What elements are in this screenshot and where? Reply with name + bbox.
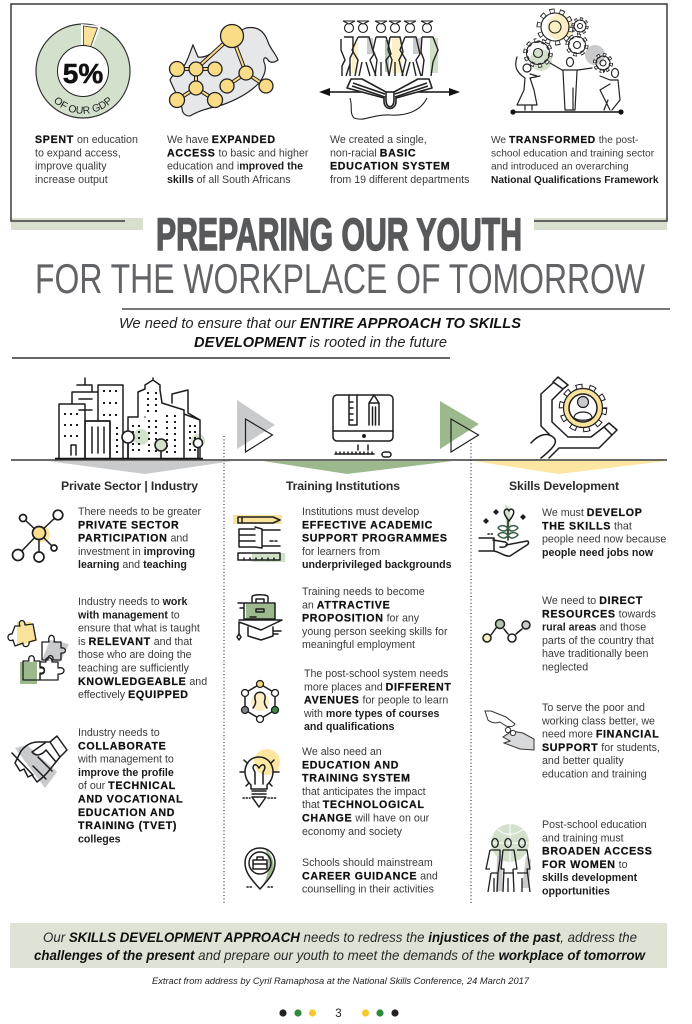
- text: financial support: FINANCIAL: [596, 729, 659, 741]
- icon: linked nodes: [483, 620, 530, 642]
- text: spent: improve quality: [35, 161, 107, 173]
- top frame: [11, 4, 667, 221]
- text: broaden access: Post-school education: [542, 819, 647, 831]
- text: develop the skills: that: [614, 520, 632, 532]
- text: collaborate: improve the profile: [78, 767, 174, 779]
- icon: handshake: [12, 736, 67, 788]
- text: collaborate: TECHNICAL: [108, 780, 176, 792]
- icon: 5% donut: OF OUR GDP: [54, 97, 110, 114]
- text: private sector participation: investment in: [78, 546, 144, 558]
- title: [35, 209, 645, 302]
- text: private sector participation: learning: [78, 559, 119, 571]
- icon: plant in hand: [479, 504, 528, 556]
- wedge: grey: [48, 461, 233, 474]
- text: academic support: Institutions must develop: [302, 506, 419, 518]
- text: education and training system: TECHNOLOGICAL: [323, 799, 425, 811]
- text: education and training system: will have on our: [355, 812, 429, 824]
- text: broaden access: FOR WOMEN: [542, 859, 616, 871]
- text: private sector participation: There needs to be greater: [78, 506, 201, 518]
- text: collaborate: COLLABORATE: [78, 740, 166, 752]
- text: spent: to expand access,: [35, 147, 121, 159]
- text: different avenues: The post-school system needs: [304, 668, 448, 680]
- text: develop the skills: people need now because: [542, 534, 666, 546]
- text: broaden access: to: [619, 859, 628, 871]
- text: attractive proposition: ATTRACTIVE: [317, 599, 390, 611]
- text: different avenues: DIFFERENT: [386, 681, 452, 693]
- text: education and training system: EDUCATION AND: [302, 759, 399, 771]
- text: work with management: EQUIPPED: [128, 689, 189, 701]
- icon: 5% donut: [35, 23, 131, 119]
- icon: city skyline: [55, 378, 205, 459]
- text: develop the skills: We must DEVELOP: [542, 507, 642, 519]
- text: work with management: is: [78, 636, 89, 648]
- icon: map pin with briefcase: [245, 848, 275, 889]
- text: expanded access: to basic and higher: [218, 147, 308, 159]
- icon: briefcase and graduation cap: [237, 595, 282, 640]
- icon: puzzle pieces: [8, 621, 69, 684]
- text: broaden access: skills development: [542, 872, 638, 884]
- icon: light bulb pencil: [240, 749, 280, 807]
- text: career guidance: counselling in their activities: [302, 884, 434, 896]
- text: expanded access: skills: [167, 174, 194, 186]
- wedge: yellow: [473, 461, 666, 474]
- arrow: green: [440, 401, 479, 452]
- text: private sector participation: PARTICIPATION: [78, 533, 168, 545]
- text: spent: increase output: [35, 174, 108, 186]
- callout banner: Our SKILLS DEVELOPMENT APPROACH needs to redress the injustices of the past, address the: [43, 930, 637, 945]
- icon: 5% donut: 5%: [63, 58, 103, 89]
- text: collaborate: AND VOCATIONAL: [78, 794, 183, 806]
- callout banner: challenges of the present and prepare our youth to meet the demands of the workplace of tomorrow: [34, 948, 646, 963]
- text: attractive proposition: meaningful employment: [302, 639, 415, 651]
- text: different avenues: more types of courses: [326, 708, 440, 720]
- text: financial support: for students,: [601, 742, 660, 754]
- text: different avenues: and qualifications: [304, 721, 395, 733]
- icon: person in hexagon network: [242, 680, 278, 722]
- header strips: [11, 218, 667, 230]
- text: expanded access: We have EXPANDED: [167, 134, 276, 146]
- arrow: grey: [237, 400, 275, 452]
- text: broaden access: BROADEN ACCESS: [542, 846, 653, 858]
- text: direct resources: We need to DIRECT: [542, 595, 643, 607]
- text: broaden access: and training must: [542, 832, 624, 844]
- text: collaborate: Industry needs to: [78, 727, 160, 739]
- text: direct resources: towards: [619, 608, 656, 620]
- text: financial support: and better quality: [542, 755, 624, 767]
- callout banner: [10, 923, 667, 968]
- text: collaborate: colleges: [78, 833, 121, 845]
- text: attractive proposition: PROPOSITION: [302, 613, 384, 625]
- page number with dots: 3: [335, 1008, 342, 1020]
- text: private sector participation: and teaching: [122, 559, 187, 571]
- text: financial support: working class better, we: [541, 715, 655, 727]
- text: transformed: school education and training sector: [491, 148, 655, 159]
- icon: wrench gripping gear and person: [531, 377, 617, 458]
- source note: Extract from address by Cyril Ramaphosa at the National Skills Conference, 24 March 2017: [152, 976, 530, 986]
- text: work with management: teaching are sufficiently: [78, 662, 190, 674]
- text: work with management: effectively: [78, 689, 128, 701]
- text: collaborate: of our: [78, 780, 108, 792]
- text: attractive proposition: young person seeking skills for: [302, 626, 448, 638]
- text: attractive proposition: an: [302, 599, 317, 611]
- icon: network: [12, 510, 63, 562]
- title: PREPARING OUR YOUTH: [156, 209, 522, 260]
- text: different avenues: for people to learn: [363, 695, 448, 707]
- text: direct resources: parts of the country that: [542, 635, 654, 647]
- text: develop the skills: people need jobs now: [542, 547, 654, 559]
- text: transformed: and introduced an overarching: [491, 162, 629, 173]
- text: academic support: SUPPORT PROGRAMMES: [302, 533, 448, 545]
- icon: people and gears: [510, 11, 624, 115]
- wedge: green: [263, 461, 453, 474]
- subtitle: [119, 315, 521, 351]
- text: private sector participation: and: [170, 533, 188, 545]
- icon: women and globe: [486, 824, 531, 892]
- text: education and training system: We also need an: [302, 746, 382, 758]
- text: direct resources: neglected: [542, 662, 588, 674]
- text: basic education: from 19 different departments: [330, 174, 469, 186]
- text: academic support: EFFECTIVE ACADEMIC: [302, 519, 433, 531]
- text: expanded access: ACCESS: [167, 147, 216, 159]
- heading: skills development: Skills Development: [509, 479, 619, 493]
- subtitle: We need to ensure that our ENTIRE APPROACH TO SKILLS: [119, 315, 521, 332]
- text: financial support: SUPPORT: [542, 742, 598, 754]
- text: direct resources: and those: [599, 622, 646, 634]
- text: basic education: BASIC: [380, 147, 416, 159]
- text: academic support: for learners from: [302, 546, 380, 558]
- text: education and training system: that: [302, 799, 323, 811]
- text: career guidance: and: [420, 870, 438, 882]
- text: develop the skills: THE SKILLS: [542, 520, 611, 532]
- text: transformed: National Qualifications Framework: [491, 175, 659, 186]
- text: direct resources: RESOURCES: [542, 608, 616, 620]
- text: financial support: need more: [542, 729, 596, 741]
- icon: map with network: [170, 24, 278, 116]
- heading: private sector: Private Sector | Industry: [61, 479, 198, 493]
- text: different avenues: with: [303, 708, 326, 720]
- icon: giving hands: [485, 711, 534, 750]
- icon: graduates, book and map: [319, 21, 460, 119]
- icon: pencil, hand and ruler: [233, 515, 285, 562]
- text: education and training system: CHANGE: [302, 812, 352, 824]
- text: education and training system: that anticipates the impact: [302, 786, 426, 798]
- text: private sector participation: PRIVATE SECTOR: [78, 519, 179, 531]
- subtitle: DEVELOPMENT is rooted in the future: [194, 334, 447, 351]
- text: work with management: Industry needs to work: [78, 596, 187, 608]
- column dividers: [224, 436, 471, 905]
- text: collaborate: TRAINING (TVET): [78, 820, 177, 832]
- text: private sector participation: improving: [144, 546, 195, 558]
- baseline: [11, 459, 667, 461]
- text: attractive proposition: for any: [387, 613, 419, 625]
- shading behind the graduates: [352, 38, 438, 73]
- text: collaborate: EDUCATION AND: [78, 807, 175, 819]
- text: spent: SPENT on education: [35, 134, 138, 146]
- text: attractive proposition: Training needs to become: [302, 586, 425, 598]
- text: financial support: education and training: [542, 768, 647, 780]
- text: work with management: KNOWLEDGEABLE: [78, 676, 186, 688]
- text: financial support: To serve the poor and: [542, 702, 645, 714]
- text: career guidance: CAREER GUIDANCE: [302, 870, 417, 882]
- text: education and training system: economy and society: [302, 826, 403, 838]
- text: work with management: with management: [77, 609, 168, 621]
- text: direct resources: rural areas: [542, 622, 597, 634]
- text: expanded access: of all South Africans: [197, 174, 291, 186]
- text: basic education: EDUCATION SYSTEM: [330, 161, 450, 173]
- text: expanded access: education and i: [167, 161, 239, 173]
- text: academic support: underprivileged backgrounds: [302, 559, 452, 571]
- text: direct resources: have traditionally been: [542, 648, 649, 660]
- text: collaborate: with management to: [77, 754, 174, 766]
- text: different avenues: AVENUES: [304, 695, 360, 707]
- text: broaden access: opportunities: [542, 886, 610, 898]
- text: transformed: We TRANSFORMED the post-: [491, 135, 638, 146]
- text: basic education: non-racial: [330, 147, 380, 159]
- heading: training institutions: Training Institutions: [286, 479, 400, 493]
- text: basic education: We created a single,: [330, 134, 427, 146]
- text: work with management: to: [171, 609, 180, 621]
- page number with dots: [279, 1008, 399, 1020]
- text: work with management: those who are doing the: [78, 649, 192, 661]
- text: work with management: RELEVANT and that: [89, 636, 192, 648]
- text: career guidance: Schools should mainstream: [302, 857, 433, 869]
- text: different avenues: more places and: [304, 681, 386, 693]
- text: expanded access: mproved the: [239, 161, 303, 173]
- text: education and training system: TRAINING SYSTEM: [302, 773, 411, 785]
- text: work with management: ensure that what is taught: [78, 623, 200, 635]
- text: work with management: and: [189, 676, 207, 688]
- icon: computer with ruler and pencil: [333, 395, 393, 457]
